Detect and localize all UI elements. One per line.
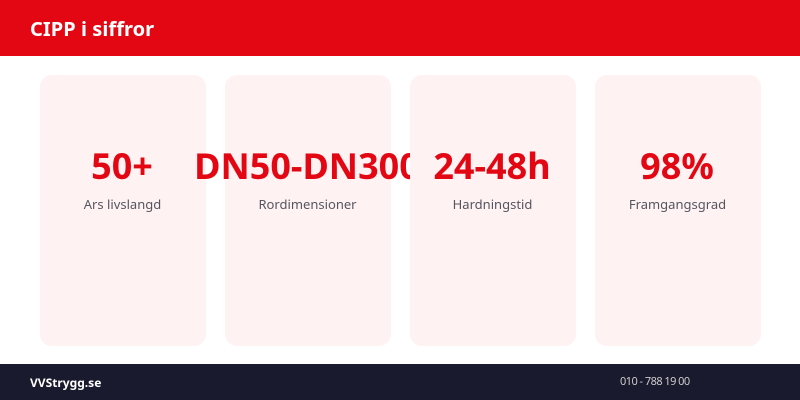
stat value: 50+ [91,141,153,190]
footer bar [0,364,800,400]
stat value: 24-48h [433,141,551,190]
stat value: DN50-DN300 [194,141,420,190]
header bar [0,0,800,56]
brand name: VVStrygg.se [30,374,101,391]
stat label: Framgangsgrad [629,195,726,213]
panel: curing time [410,75,576,346]
title: CIPP i siffror [30,15,154,42]
phone number: 010 - 788 19 00 [620,374,690,389]
stat label: Hardningstid [453,195,532,213]
stat label: Ars livslangd [84,195,161,213]
panel: success rate [595,75,761,346]
stat label: Rordimensioner [258,195,357,213]
panel: pipe dimensions [225,75,391,346]
panel: lifespan [40,75,206,346]
stat value: 98% [640,141,714,190]
